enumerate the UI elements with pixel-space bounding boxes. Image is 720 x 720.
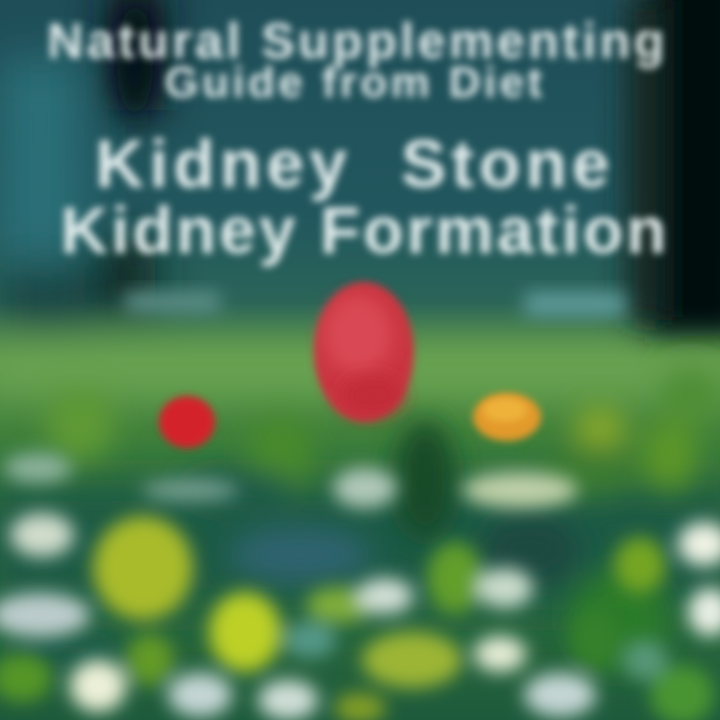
heading line 1: Kidney Stone <box>95 126 615 202</box>
yellow-orange flower <box>473 393 541 441</box>
faint background labels <box>125 292 625 316</box>
red kidney-shaped fruit <box>314 282 414 422</box>
heading line 2: Kidney Formation <box>60 193 670 267</box>
small red berry <box>159 396 215 448</box>
foreground leaves and white flowers <box>0 453 720 720</box>
title line 1: Natural Supplementing <box>47 13 668 69</box>
title line 2: Guide from Diet <box>164 58 546 107</box>
